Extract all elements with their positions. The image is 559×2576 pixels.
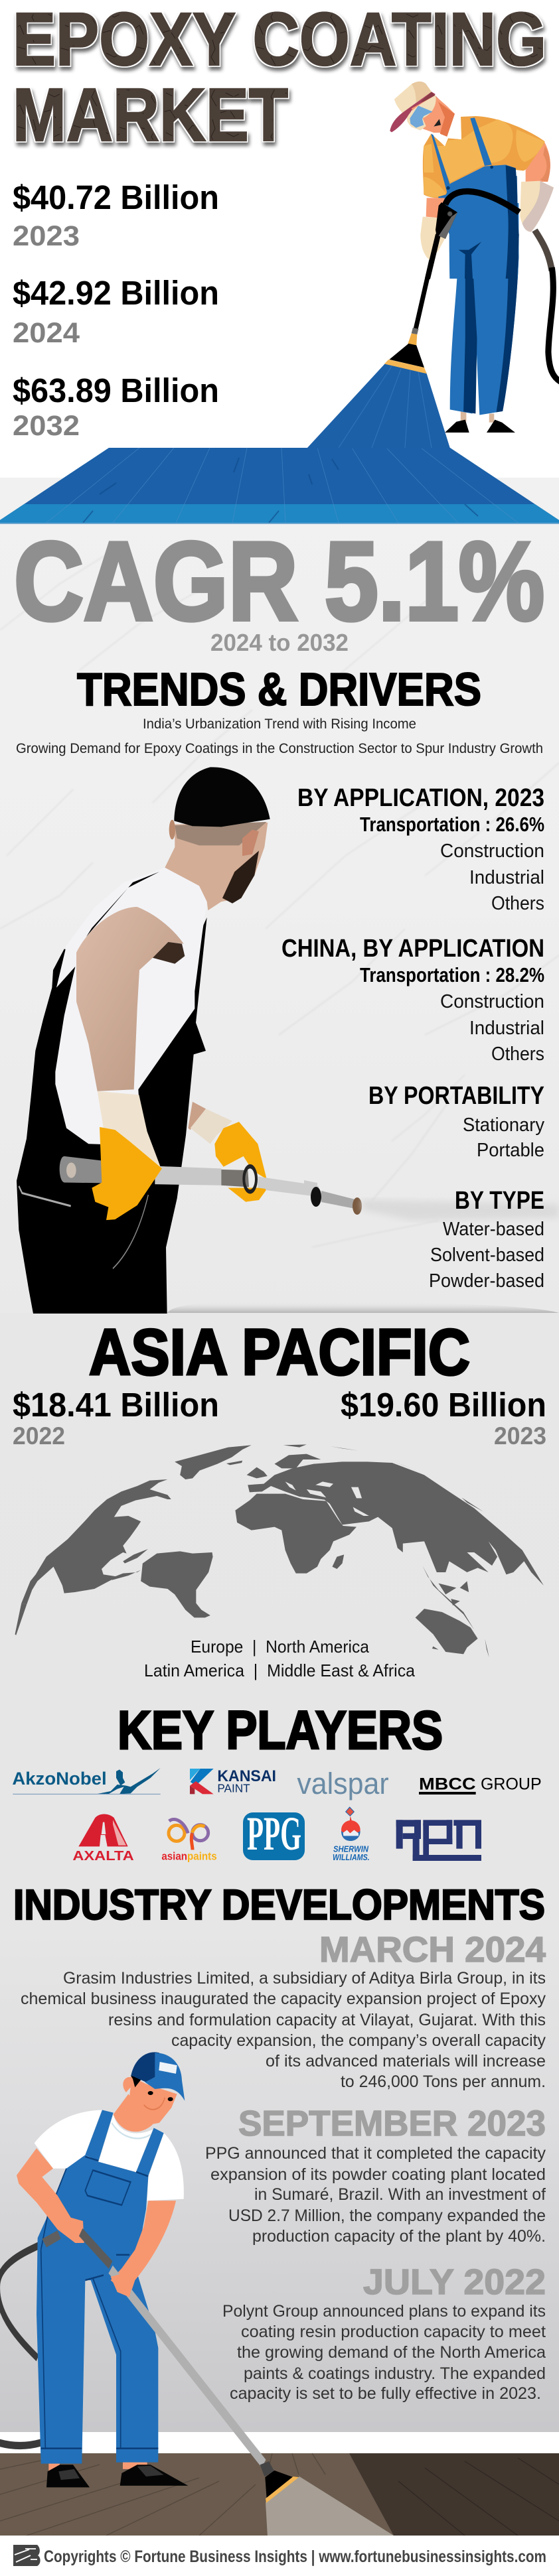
development: march 2024: resins and formulation capacity at Vilayat, Gujarat. With this bbox=[108, 2011, 546, 2029]
development: july 2022: coating resin production capacity to meet bbox=[241, 2323, 546, 2341]
hose connector and handle bbox=[42, 2230, 61, 2248]
title: MARKET bbox=[13, 73, 288, 157]
pole bbox=[111, 2270, 264, 2464]
left glove bbox=[420, 217, 445, 260]
market size statistics bbox=[13, 178, 219, 442]
blue coated floor bbox=[0, 448, 559, 524]
world map bbox=[15, 1444, 544, 1657]
logo: axalta: AXALTA bbox=[72, 1849, 134, 1864]
development: march 2024: MARCH 2024 bbox=[319, 1930, 546, 1970]
logo: valspar: valspar bbox=[297, 1767, 389, 1800]
asia pacific 2023 value: $19.60 Billion bbox=[341, 1386, 546, 1424]
logo: mbcc group: MBCC bbox=[419, 1776, 476, 1794]
key players heading: KEY PLAYERS bbox=[118, 1700, 443, 1761]
overall trousers bbox=[445, 203, 519, 415]
overalls bbox=[37, 2155, 158, 2464]
development: july 2022: paints & coatings industry. The expanded bbox=[244, 2364, 546, 2383]
mouth bbox=[434, 119, 441, 127]
logo: asian paints: asianpaints bbox=[161, 1850, 217, 1862]
driver line: Growing Demand for Epoxy Coatings in the Construction Sector to Spur Industry Growth bbox=[16, 741, 543, 756]
lower legs and shoes bbox=[461, 411, 494, 423]
development: march 2024: Grasim Industries Limited, a subsidiary of Aditya Birla Group, in its bbox=[63, 1969, 546, 1988]
photo: worker with roller pole bbox=[17, 767, 559, 1314]
development: march 2024: capacity expansion, the company’s overall capacity bbox=[171, 2031, 546, 2050]
black overalls bbox=[17, 917, 207, 1314]
development: september 2023: production capacity of the plant by 40%. bbox=[252, 2227, 546, 2246]
logo: akzonobel bbox=[12, 1768, 161, 1794]
development: july 2022: Polynt Group announced plans to expand its bbox=[222, 2302, 546, 2321]
by portability list: Stationary bbox=[463, 1115, 544, 1136]
logo: asian paints bbox=[161, 1819, 217, 1862]
logo: axalta bbox=[72, 1814, 134, 1864]
asia pacific heading: ASIA PACIFIC bbox=[89, 1316, 470, 1389]
pocket trim and wire bbox=[19, 1186, 71, 1206]
development: september 2023: expansion of its powder coating plant located bbox=[210, 2165, 546, 2184]
logo: sherwin williams: WILLIAMS. bbox=[333, 1853, 370, 1862]
arms bbox=[526, 143, 550, 182]
straps bbox=[431, 134, 450, 192]
development: july 2022: capacity is set to be fully effective in 2023. bbox=[230, 2384, 541, 2403]
asia pacific 2023 value: 2023 bbox=[494, 1422, 546, 1450]
neck and head bbox=[165, 823, 268, 910]
by portability list: Portable bbox=[477, 1140, 544, 1161]
logo: sherwin williams: SHERWIN bbox=[333, 1845, 369, 1854]
front yellow glove bbox=[92, 1127, 162, 1220]
development: september 2023: USD 2.7 Million, the company expanded the bbox=[228, 2206, 546, 2225]
iceland bbox=[226, 1461, 242, 1465]
development: march 2024: to 246,000 Tons per annum. bbox=[341, 2072, 546, 2091]
shirt bbox=[423, 116, 545, 198]
by portability list bbox=[368, 1082, 544, 1161]
footer bar bbox=[0, 2536, 559, 2576]
ear bbox=[242, 830, 259, 856]
hose to the right bbox=[535, 230, 552, 271]
development: september 2023 bbox=[205, 2104, 546, 2246]
CAGR period: 2024 to 2032 bbox=[210, 629, 349, 656]
panel: lower grey wall background bbox=[0, 1313, 559, 2432]
by type list: Solvent-based bbox=[430, 1245, 544, 1266]
white t-shirt bbox=[55, 868, 207, 1146]
hair bbox=[174, 767, 270, 827]
head and neck bbox=[114, 2094, 153, 2132]
overall seams bbox=[41, 2157, 158, 2449]
development: july 2022 bbox=[222, 2262, 546, 2403]
development: march 2024: chemical business inaugurated the capacity expansion project of Epoxy bbox=[21, 1990, 546, 2008]
market size statistics: 2024 bbox=[13, 317, 80, 349]
asia pacific 2022 value: $18.41 Billion bbox=[13, 1386, 219, 1424]
logo: kansai paint bbox=[190, 1767, 276, 1795]
market size statistics: 2023 bbox=[13, 220, 80, 252]
market size statistics: $42.92 Billion bbox=[13, 274, 219, 312]
logo: kansai paint: PAINT bbox=[217, 1782, 250, 1795]
trends and drivers heading: TRENDS & DRIVERS bbox=[77, 663, 481, 715]
asia pacific 2022 value bbox=[13, 1386, 219, 1450]
other regions list: Latin America | Middle East & Africa bbox=[144, 1661, 416, 1680]
uk and scandinavia bbox=[247, 1467, 268, 1478]
broom bristles bbox=[307, 364, 450, 448]
asia pacific 2023 value bbox=[341, 1386, 546, 1450]
wood floor bbox=[0, 2453, 559, 2537]
cap bbox=[131, 2052, 159, 2082]
sprayed floor patch bbox=[266, 2476, 394, 2537]
worker two bbox=[0, 2052, 299, 2503]
south america bbox=[141, 1551, 213, 1617]
by application 2023 list bbox=[297, 784, 544, 914]
other regions list bbox=[144, 1637, 416, 1680]
logo: kansai paint: KANSAI bbox=[217, 1767, 276, 1785]
eurasia bbox=[248, 1461, 544, 1586]
trend line: India’s Urbanization Trend with Rising Income bbox=[143, 716, 416, 732]
pole bbox=[428, 234, 438, 279]
south east asia islands bbox=[422, 1566, 474, 1630]
face bbox=[412, 96, 455, 133]
africa bbox=[235, 1494, 357, 1574]
by application 2023 list: Construction bbox=[440, 841, 544, 862]
upper arm bbox=[76, 907, 184, 1091]
logo: fortune business insights bbox=[13, 2545, 40, 2566]
baseboard bbox=[0, 2432, 559, 2453]
asia pacific 2022 value: 2022 bbox=[13, 1422, 65, 1450]
logo: ppg: PPG bbox=[247, 1807, 301, 1860]
panel: marble wall background bbox=[0, 478, 559, 1313]
hose over the chest bbox=[445, 191, 519, 212]
development: march 2024 bbox=[21, 1930, 546, 2091]
greenland bbox=[175, 1445, 252, 1479]
inland seas bbox=[285, 1481, 369, 1516]
by type list bbox=[429, 1187, 544, 1292]
curved divider shadow bbox=[167, 1301, 559, 1313]
development: september 2023: SEPTEMBER 2023 bbox=[238, 2104, 546, 2143]
t-shirt bbox=[35, 2110, 102, 2169]
left arm bbox=[17, 2148, 84, 2243]
beard bbox=[222, 850, 259, 904]
by type list: Water-based bbox=[443, 1219, 544, 1240]
madagascar bbox=[332, 1554, 344, 1569]
rear glove bbox=[188, 1102, 206, 1130]
ankles and shoes bbox=[48, 2461, 147, 2471]
hat bbox=[394, 82, 432, 113]
page background: white hero bbox=[0, 0, 559, 478]
worker one with broom bbox=[307, 82, 559, 448]
development: july 2022: JULY 2022 bbox=[363, 2262, 546, 2302]
by application 2023 list: Others bbox=[491, 893, 544, 914]
title bbox=[13, 0, 546, 157]
overalls bib bbox=[438, 165, 519, 279]
development: july 2022: the growing demand of the North America bbox=[237, 2343, 546, 2362]
goggles bbox=[407, 95, 436, 131]
spray gun bbox=[436, 202, 457, 239]
arctic slivers bbox=[283, 1444, 307, 1448]
pole sections bbox=[60, 1156, 120, 1184]
market size statistics: $63.89 Billion bbox=[13, 372, 219, 409]
logo: mbcc group: GROUP bbox=[481, 1776, 542, 1794]
australia bbox=[416, 1609, 478, 1654]
logo: mbcc group bbox=[419, 1776, 542, 1795]
right arm bbox=[111, 2201, 176, 2297]
logo: rpm bbox=[396, 1820, 481, 1861]
china by application list: Others bbox=[491, 1044, 544, 1065]
front wrist cuff bbox=[98, 1091, 161, 1167]
china by application list bbox=[281, 935, 544, 1065]
logo: sherwin williams bbox=[333, 1807, 370, 1862]
china by application list: Construction bbox=[440, 991, 544, 1012]
development: september 2023: in Sumaré, Brazil. With an investment of bbox=[254, 2185, 546, 2204]
logo: ppg bbox=[243, 1807, 305, 1860]
caribbean and central america bbox=[123, 1549, 148, 1564]
broom pole and head bbox=[416, 236, 437, 329]
development: march 2024: of its advanced materials will increase bbox=[266, 2052, 546, 2070]
by application 2023 list: Industrial bbox=[469, 867, 544, 888]
collar bbox=[433, 114, 461, 147]
other regions list: Europe | North America bbox=[191, 1637, 370, 1657]
china by application list: Industrial bbox=[469, 1018, 544, 1039]
market size statistics: $40.72 Billion bbox=[13, 178, 219, 216]
hose bbox=[0, 2243, 44, 2358]
market size statistics: 2032 bbox=[13, 410, 80, 442]
development: september 2023: PPG announced that it completed the capacity bbox=[205, 2144, 546, 2163]
by type list: Powder-based bbox=[429, 1270, 544, 1292]
pole end and roller bbox=[304, 1180, 317, 1195]
right glove bbox=[520, 181, 554, 232]
north america bbox=[21, 1479, 171, 1604]
logo: akzonobel: AkzoNobel bbox=[12, 1769, 107, 1789]
